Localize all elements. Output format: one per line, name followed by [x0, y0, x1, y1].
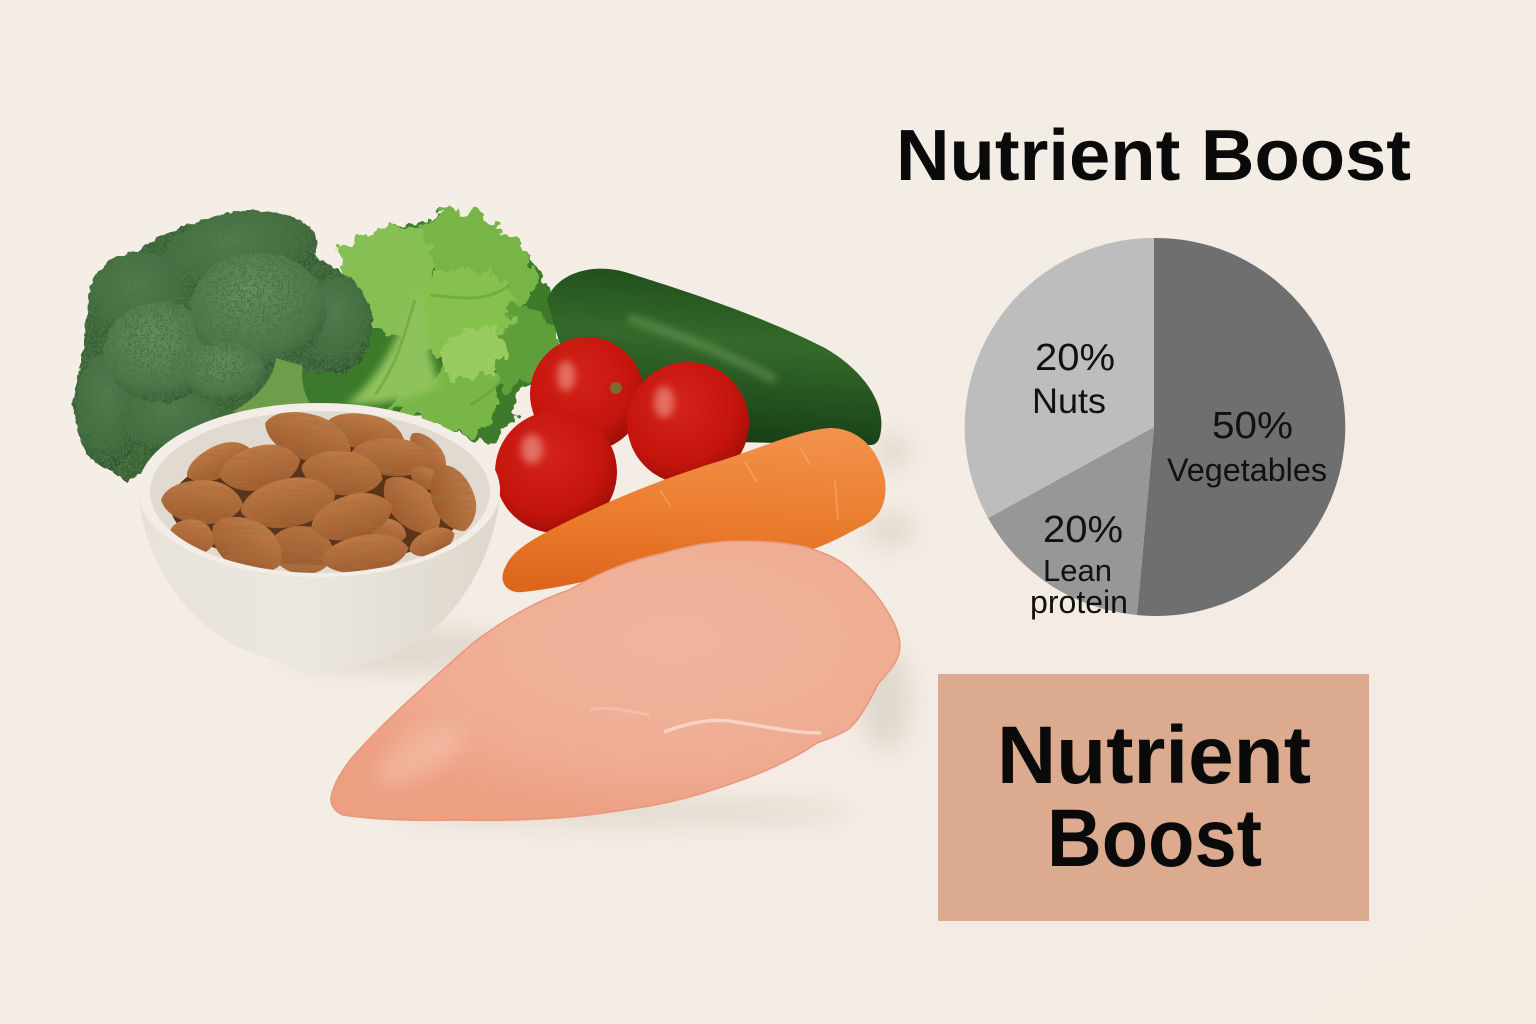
slice: nuts 20%	[965, 238, 1154, 518]
chicken breast	[331, 541, 900, 820]
bowl interior	[150, 411, 490, 573]
infographic canvas	[71, 128, 1410, 921]
callout text: Boost	[1047, 793, 1262, 884]
label: lean protein: 20%	[1043, 509, 1123, 551]
label: lean protein	[1030, 509, 1128, 620]
bowl of almonds	[138, 401, 500, 668]
label: nuts: Nuts	[1032, 382, 1106, 421]
soft shadows	[280, 436, 915, 824]
label: nuts	[1032, 337, 1115, 421]
carrot	[502, 428, 886, 592]
almonds	[161, 412, 476, 573]
label: vegetables	[1167, 405, 1327, 488]
label: vegetables: Vegetables	[1167, 452, 1327, 488]
label: lean protein: Lean	[1043, 553, 1112, 588]
label: nuts: 20%	[1035, 337, 1115, 379]
title: Nutrient Boost	[896, 116, 1411, 196]
label: lean protein: protein	[1030, 584, 1128, 620]
label: vegetables: 50%	[1212, 405, 1293, 447]
bowl rim	[138, 403, 500, 577]
callout text: Nutrient	[997, 710, 1311, 801]
cucumber	[547, 269, 881, 445]
bowl body	[138, 490, 500, 668]
callout text	[997, 710, 1311, 884]
food photo group	[73, 202, 915, 824]
pie chart	[965, 238, 1345, 620]
broccoli stem	[232, 358, 314, 412]
callout box	[938, 674, 1369, 921]
tomatoes	[495, 337, 749, 533]
lettuce	[295, 211, 560, 445]
broccoli	[73, 202, 373, 482]
slice: vegetables 50%	[1137, 238, 1345, 616]
slice: lean protein 20%	[988, 427, 1154, 615]
